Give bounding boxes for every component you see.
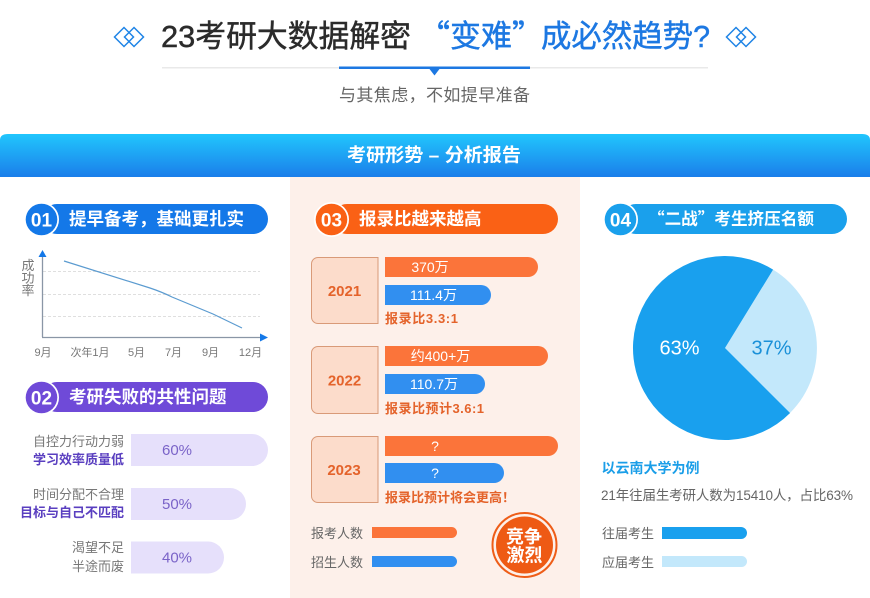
- year block: 2021: 370万: [411, 259, 449, 275]
- year block: 2022: 约400+万: [411, 348, 470, 364]
- problem row 2: [20, 487, 246, 520]
- panel: middle background: [290, 177, 580, 598]
- icon: right diamonds: [726, 28, 756, 46]
- x axis labels: 7月: [165, 347, 182, 359]
- x axis labels: 5月: [128, 347, 145, 359]
- heading: 02: 02: [31, 388, 52, 410]
- problem row 1: 60%: [162, 442, 192, 459]
- problem row 1: 自控力行动力弱: [33, 434, 124, 449]
- x axis labels: 次年1月: [70, 345, 110, 359]
- year block: 2022: 报录比预计3.6:1: [385, 401, 484, 416]
- pie chart: 37%: [751, 338, 792, 360]
- problem row 3: 半途而废: [72, 559, 124, 574]
- pie chart: [633, 256, 817, 440]
- stamp: fierce competition: 竞争: [506, 526, 542, 547]
- heading: 04: 04: [610, 210, 631, 232]
- y axis label: [21, 258, 35, 298]
- legend: graduate types: 往届考生: [602, 526, 654, 541]
- title: “变难”: [419, 11, 543, 56]
- y axis label: 功: [21, 270, 35, 286]
- year block: 2023: [312, 436, 558, 505]
- year block: 2023: ?: [431, 438, 439, 454]
- stamp: fierce competition: 激烈: [506, 546, 542, 566]
- subtitle: 与其焦虑，不如提早准备: [339, 86, 530, 105]
- x axis labels: 12月: [239, 347, 262, 359]
- problem row 2: 目标与自己不匹配: [20, 505, 124, 520]
- problem row 3: [72, 540, 224, 574]
- heading: 01: 01: [31, 210, 52, 232]
- case text: 21年往届生考研人数为15410人，占比63%: [601, 488, 853, 503]
- heading: 02: 考研失败的共性问题: [69, 387, 227, 407]
- problem row 3: 渴望不足: [72, 540, 124, 555]
- year block: 2021: 报录比3.3:1: [385, 311, 458, 326]
- y axis label: 成: [21, 258, 35, 273]
- y axis label: 率: [21, 283, 35, 298]
- legend: applicants and admissions: 招生人数: [311, 555, 363, 570]
- year block: 2021: 2021: [328, 283, 361, 300]
- icon: left diamonds: [114, 28, 144, 46]
- heading: 03: 报录比越来越高: [359, 209, 482, 229]
- problem row 1: [33, 434, 268, 467]
- x axis labels: 9月: [34, 347, 52, 359]
- heading: 02: [24, 380, 268, 415]
- line chart: success rate: [21, 250, 268, 359]
- banner: [0, 134, 870, 177]
- problem row 1: 学习效率质量低: [33, 452, 124, 467]
- x axis labels: [34, 345, 262, 359]
- banner: 考研形势 – 分析报告: [347, 144, 521, 166]
- problem row 3: 40%: [162, 550, 192, 566]
- year block: 2023: ?: [431, 465, 439, 481]
- title: [161, 11, 710, 56]
- year block: 2023: 报录比预计将会更高！: [385, 490, 515, 505]
- year block: 2021: [312, 257, 538, 326]
- legend: applicants and admissions: [311, 526, 457, 570]
- legend: applicants and admissions: 报考人数: [311, 526, 363, 541]
- legend: graduate types: 应届考生: [602, 555, 654, 570]
- heading: 04: [603, 202, 847, 237]
- pie chart: 63%: [659, 338, 700, 360]
- year block: 2021: 111.4万: [410, 287, 457, 303]
- year block: 2022: 2022: [328, 372, 361, 390]
- x axis labels: 9月: [202, 347, 219, 359]
- legend: graduate types: [602, 526, 747, 570]
- heading: 01: 提早备考，基础更扎实: [69, 209, 244, 229]
- heading: 03: 03: [321, 210, 342, 232]
- stamp: fierce competition: [492, 513, 556, 577]
- year block: 2022: 110.7万: [410, 376, 458, 392]
- case heading: 以云南大学为例: [602, 460, 700, 476]
- title: 成必然趋势?: [541, 19, 710, 54]
- year block: 2023: 2023: [327, 462, 361, 479]
- title: 23考研大数据解密: [161, 19, 411, 54]
- heading: 03: [314, 202, 558, 237]
- year block: 2022: [312, 346, 548, 416]
- title underline: [162, 66, 708, 76]
- heading: 01: [24, 202, 268, 237]
- problem row 2: 时间分配不合理: [33, 487, 124, 502]
- heading: 04: “二战”考生挤压名额: [648, 206, 814, 230]
- problem row 2: 50%: [162, 496, 192, 513]
